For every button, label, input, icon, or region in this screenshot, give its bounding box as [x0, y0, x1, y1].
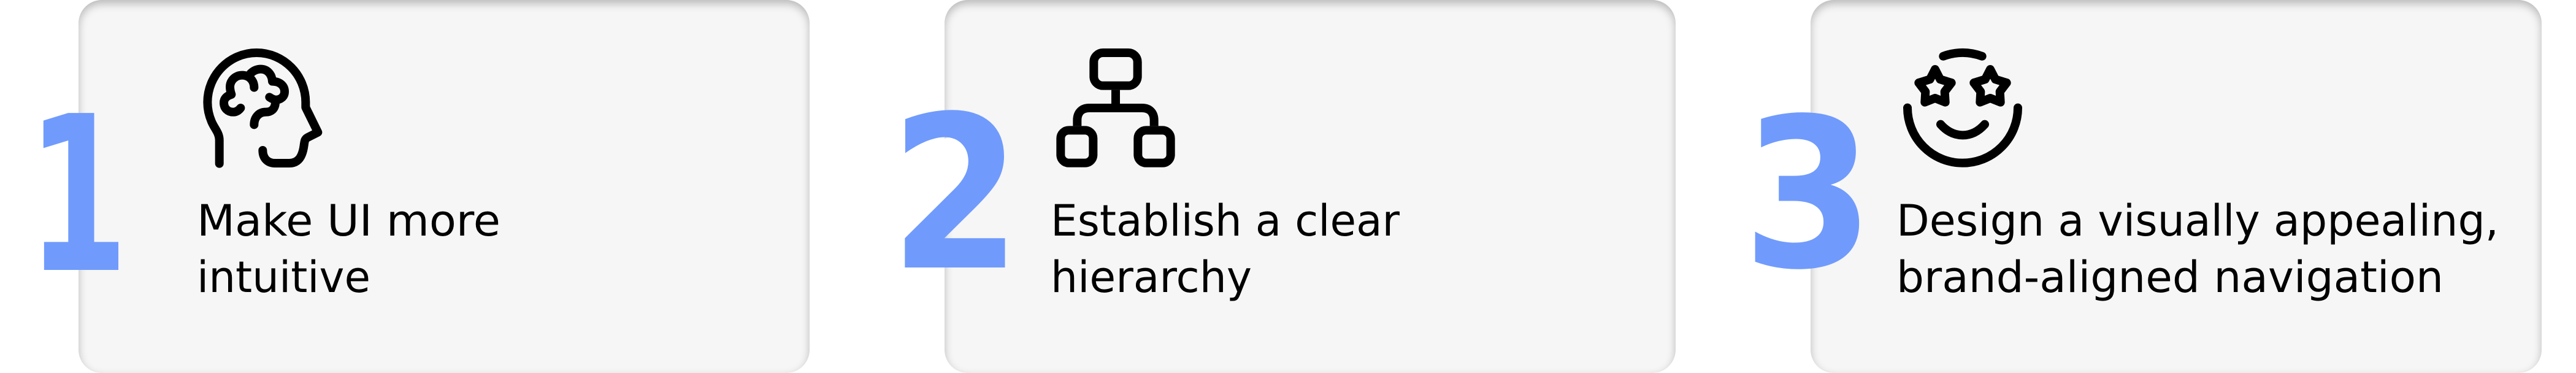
card background 2: [945, 0, 1676, 373]
white backing behind number 2: [945, 131, 976, 213]
icon: head with brain: [207, 53, 318, 164]
text: make UI more intuitive: [197, 196, 500, 302]
panel: step 3: [1742, 0, 2542, 373]
text: establish a clear hierarchy: [1051, 196, 1400, 302]
card background 3: [1811, 0, 2542, 373]
text: design a visually appealing, brand-aligned navigation: brand-aligned navigation: [1896, 252, 2444, 302]
text: establish a clear hierarchy: hierarchy: [1051, 252, 1252, 302]
panel: step 2: [890, 0, 1676, 373]
white backing behind number 3: [1811, 138, 1840, 242]
text: make UI more intuitive: Make UI more: [197, 196, 500, 246]
panel: step 1: [27, 0, 810, 373]
number 2: 2: [890, 71, 1021, 318]
icon: hierarchy diagram: [1060, 53, 1171, 163]
number 3: 3: [1742, 75, 1874, 315]
card background 1: [79, 0, 810, 373]
text: design a visually appealing, brand-aligned navigation: Design a visually appealing,: [1896, 196, 2499, 246]
icon: star-eyed smiley: [1907, 53, 2018, 163]
text: make UI more intuitive: intuitive: [197, 252, 370, 302]
text: design a visually appealing, brand-aligned navigation: [1896, 196, 2499, 302]
text: establish a clear hierarchy: Establish a clear: [1051, 196, 1400, 246]
number 1: 1: [27, 70, 128, 321]
